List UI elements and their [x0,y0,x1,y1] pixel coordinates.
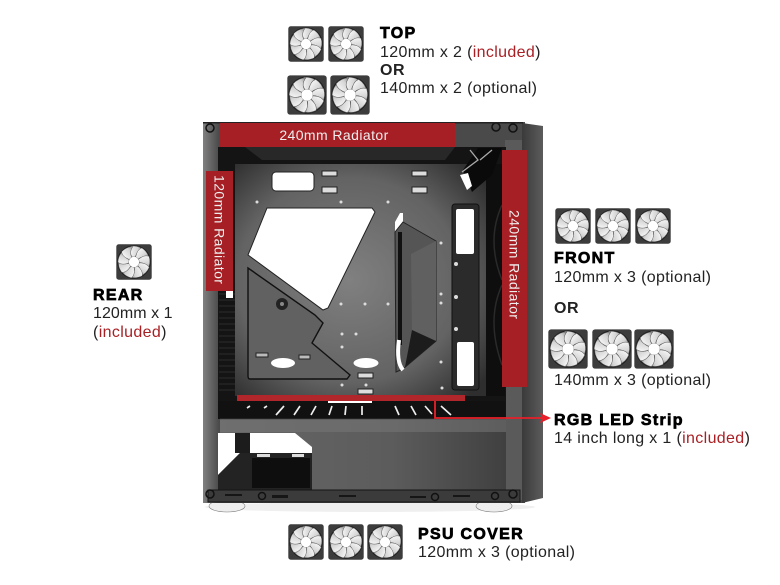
front 140mm fan icons [548,329,674,369]
left 120mm radiator [206,171,233,291]
PSU cover label: PSU COVER [418,526,524,543]
top 240mm radiator [220,123,455,147]
PSU cover label [418,526,575,561]
LED strip bar [237,395,465,401]
rear label [93,287,173,341]
rear label: REAR [93,287,144,304]
front 140mm label: 140mm x 3 (optional) [554,372,711,389]
rear label: (included) [93,324,167,341]
top label [380,25,541,97]
RGB LED strip label [554,412,750,447]
front 120mm fan icons [555,208,671,244]
rear fan icon [116,244,152,280]
front label: FRONT [554,250,616,267]
RGB LED strip label: 14 inch long x 1 (included) [554,430,750,447]
top fan icons [287,26,370,115]
PSU cover fan icons [288,524,403,560]
front label [554,250,711,317]
front label: OR [554,300,579,317]
top label: 120mm x 2 (included) [380,44,541,61]
top label: OR [380,62,405,79]
top 240mm radiator: 240mm Radiator [279,127,389,143]
PC case photo [203,122,543,512]
RGB LED strip label: RGB LED Strip [554,412,684,429]
PSU cover label: 120mm x 3 (optional) [418,544,575,561]
left 120mm radiator: 120mm Radiator [212,175,228,284]
right 240mm radiator: 240mm Radiator [506,210,522,319]
right 240mm radiator [502,150,527,387]
arrow to RGB LED strip [435,401,551,423]
front label: 120mm x 3 (optional) [554,269,711,286]
top label: TOP [380,25,417,42]
rear label: 120mm x 1 [93,305,173,322]
top label: 140mm x 2 (optional) [380,80,537,97]
